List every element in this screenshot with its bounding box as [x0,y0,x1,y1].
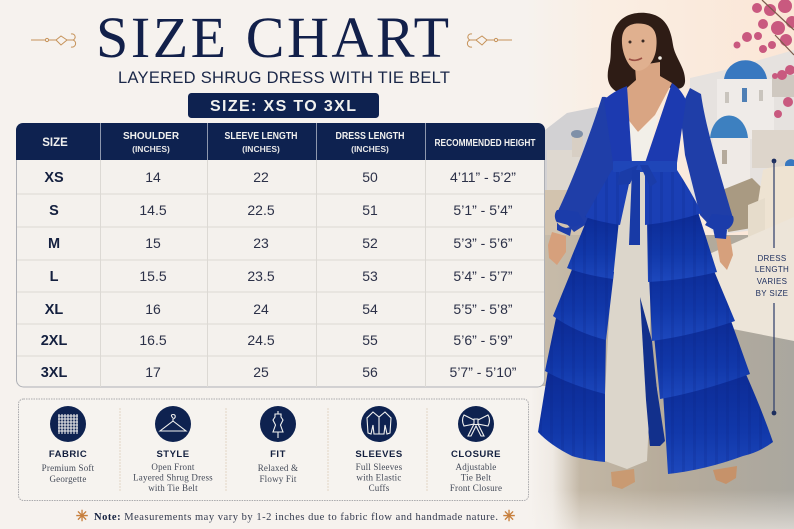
feature: style [133,406,213,493]
features panel [18,399,528,500]
feature: style: Layered Shrug Dress [133,472,213,482]
row S [49,202,513,219]
table header: (INCHES) [132,144,170,154]
dress length measure line and label: VARIES [757,277,787,286]
left ornament [31,34,76,47]
row XS: 4’11” - 5’2” [450,169,516,185]
table header: (INCHES) [242,144,280,154]
ground fade [530,386,580,529]
row L: 53 [362,268,378,284]
pink bougainvillea flowers [734,0,794,118]
row 3XL: 3XL [41,365,67,381]
dress length measure line and label [755,159,789,415]
blue dome small [710,116,748,138]
row M [48,235,513,252]
size range badge [188,93,379,118]
row XL: 16 [145,301,161,317]
note: ✳ [503,508,516,525]
bodice panels [604,83,686,163]
table header: SIZE [42,137,68,149]
feature: sleeves [355,406,403,493]
feature: fit: FIT [270,449,286,460]
skin neck and chest [623,62,672,132]
mountains [545,107,625,190]
row M: 52 [362,235,378,251]
row 2XL: 24.5 [247,332,275,348]
row S: 51 [362,202,378,218]
table header: SHOULDER [123,131,180,142]
hands [548,232,733,270]
row M: M [48,236,60,252]
feature: fabric: Premium Soft [42,463,95,473]
tier 3 [553,262,735,341]
row S: 5’1” - 5’4” [453,202,513,218]
row S: S [49,203,59,219]
tier 2 [567,212,717,282]
tier 5 bottom [538,370,773,474]
table header: (INCHES) [351,144,389,154]
row XS: 22 [253,169,269,185]
table header: RECOMMENDED HEIGHT [434,138,536,149]
row S: 22.5 [247,202,275,218]
row L: 5’4” - 5’7” [453,268,513,284]
table header: SLEEVE LENGTH [224,131,298,142]
note: Note: Measurements may vary by 1-2 inches due to fabric flow and handmade nature. [94,512,498,523]
white pants [605,172,650,469]
feature: fit [258,406,298,484]
white top [623,115,658,163]
row 2XL: 55 [362,332,378,348]
feature: closure: Front Closure [450,483,502,493]
row 2XL: 2XL [41,333,67,349]
row L [50,268,513,285]
dress length measure line and label: LENGTH [755,265,789,274]
row XL: 24 [253,301,269,317]
right ornament [467,34,512,47]
tie belt with bow [613,161,677,245]
note: ✳ [76,508,89,525]
size table [16,123,545,387]
row 2XL [41,332,513,349]
back dress strip [640,297,662,446]
tier 4 [545,318,750,399]
row 2XL: 5’6” - 5’9” [453,332,513,348]
white terrace walls [700,166,794,341]
row L: 15.5 [139,268,167,284]
feature: fabric: Georgette [49,474,87,484]
feature: sleeves: SLEEVES [355,449,403,460]
row 3XL: 5’7” - 5’10” [450,364,517,380]
row 2XL: 16.5 [139,332,167,348]
far village [545,130,607,240]
sandals and feet [611,466,737,489]
dress length measure line and label: BY SIZE [756,289,788,298]
back dress layer [640,280,665,446]
hair back [608,13,685,93]
table header [16,123,545,160]
row 3XL: 56 [362,364,378,380]
row XL [45,301,513,318]
blue dome large [724,60,767,79]
face [622,24,657,71]
row 3XL: 25 [253,364,269,380]
feature: closure [450,406,502,493]
row XS: 50 [362,169,378,185]
feature: fit: Flowy Fit [259,474,297,484]
row S: 14.5 [139,202,167,218]
table header: DRESS LENGTH [336,131,404,142]
sheer right sleeve [680,88,733,232]
note [76,508,516,525]
table body [16,150,544,387]
row XS: 14 [145,169,161,185]
size range badge: SIZE: XS TO 3XL [210,98,356,115]
row M: 23 [253,235,269,251]
subtitle: LAYERED SHRUG DRESS WITH TIE BELT [118,69,450,87]
feature: sleeves: Full Sleeves [356,462,403,472]
feature: style: Open Front [151,462,195,472]
row L: 23.5 [247,268,275,284]
title: SIZE CHART [96,5,449,70]
feature: style: with Tie Belt [148,483,198,493]
feature: closure: Tie Belt [461,472,492,482]
row 3XL [41,364,517,381]
feature: style: STYLE [156,449,190,460]
row XS [44,169,516,186]
row XS: XS [44,170,64,186]
feature: fabric: FABRIC [49,449,87,460]
white village buildings [690,50,794,235]
photo: model in blue layered shrug dress on Santorini terrace [530,0,794,529]
feature: fit: Relaxed & [258,463,298,473]
row XL: XL [45,302,63,318]
feature: closure: CLOSURE [451,449,501,460]
feature: sleeves: Cuffs [369,483,390,493]
sheer left sleeve [557,97,616,232]
cobbled ground [530,235,794,529]
tier 1 peplum [585,170,702,225]
feature: closure: Adjustable [456,462,496,472]
row XL: 5’5” - 5’8” [453,301,513,317]
feature: sleeves: with Elastic [356,472,402,482]
row M: 5’3” - 5’6” [453,235,513,251]
dress length measure line and label: DRESS [757,254,787,263]
row XL: 54 [362,301,378,317]
row 3XL: 17 [145,364,161,380]
row L: L [50,269,59,285]
row M: 15 [145,235,161,251]
feature: fabric [42,406,95,484]
